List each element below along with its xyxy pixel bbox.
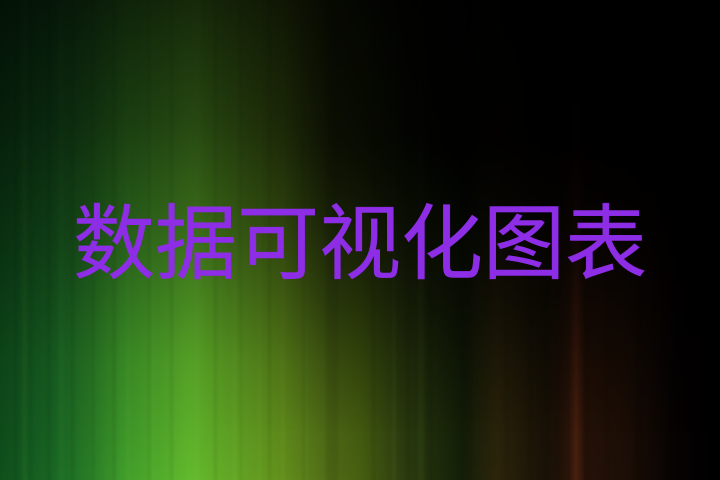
title: 数据可视化图表: [73, 199, 647, 290]
